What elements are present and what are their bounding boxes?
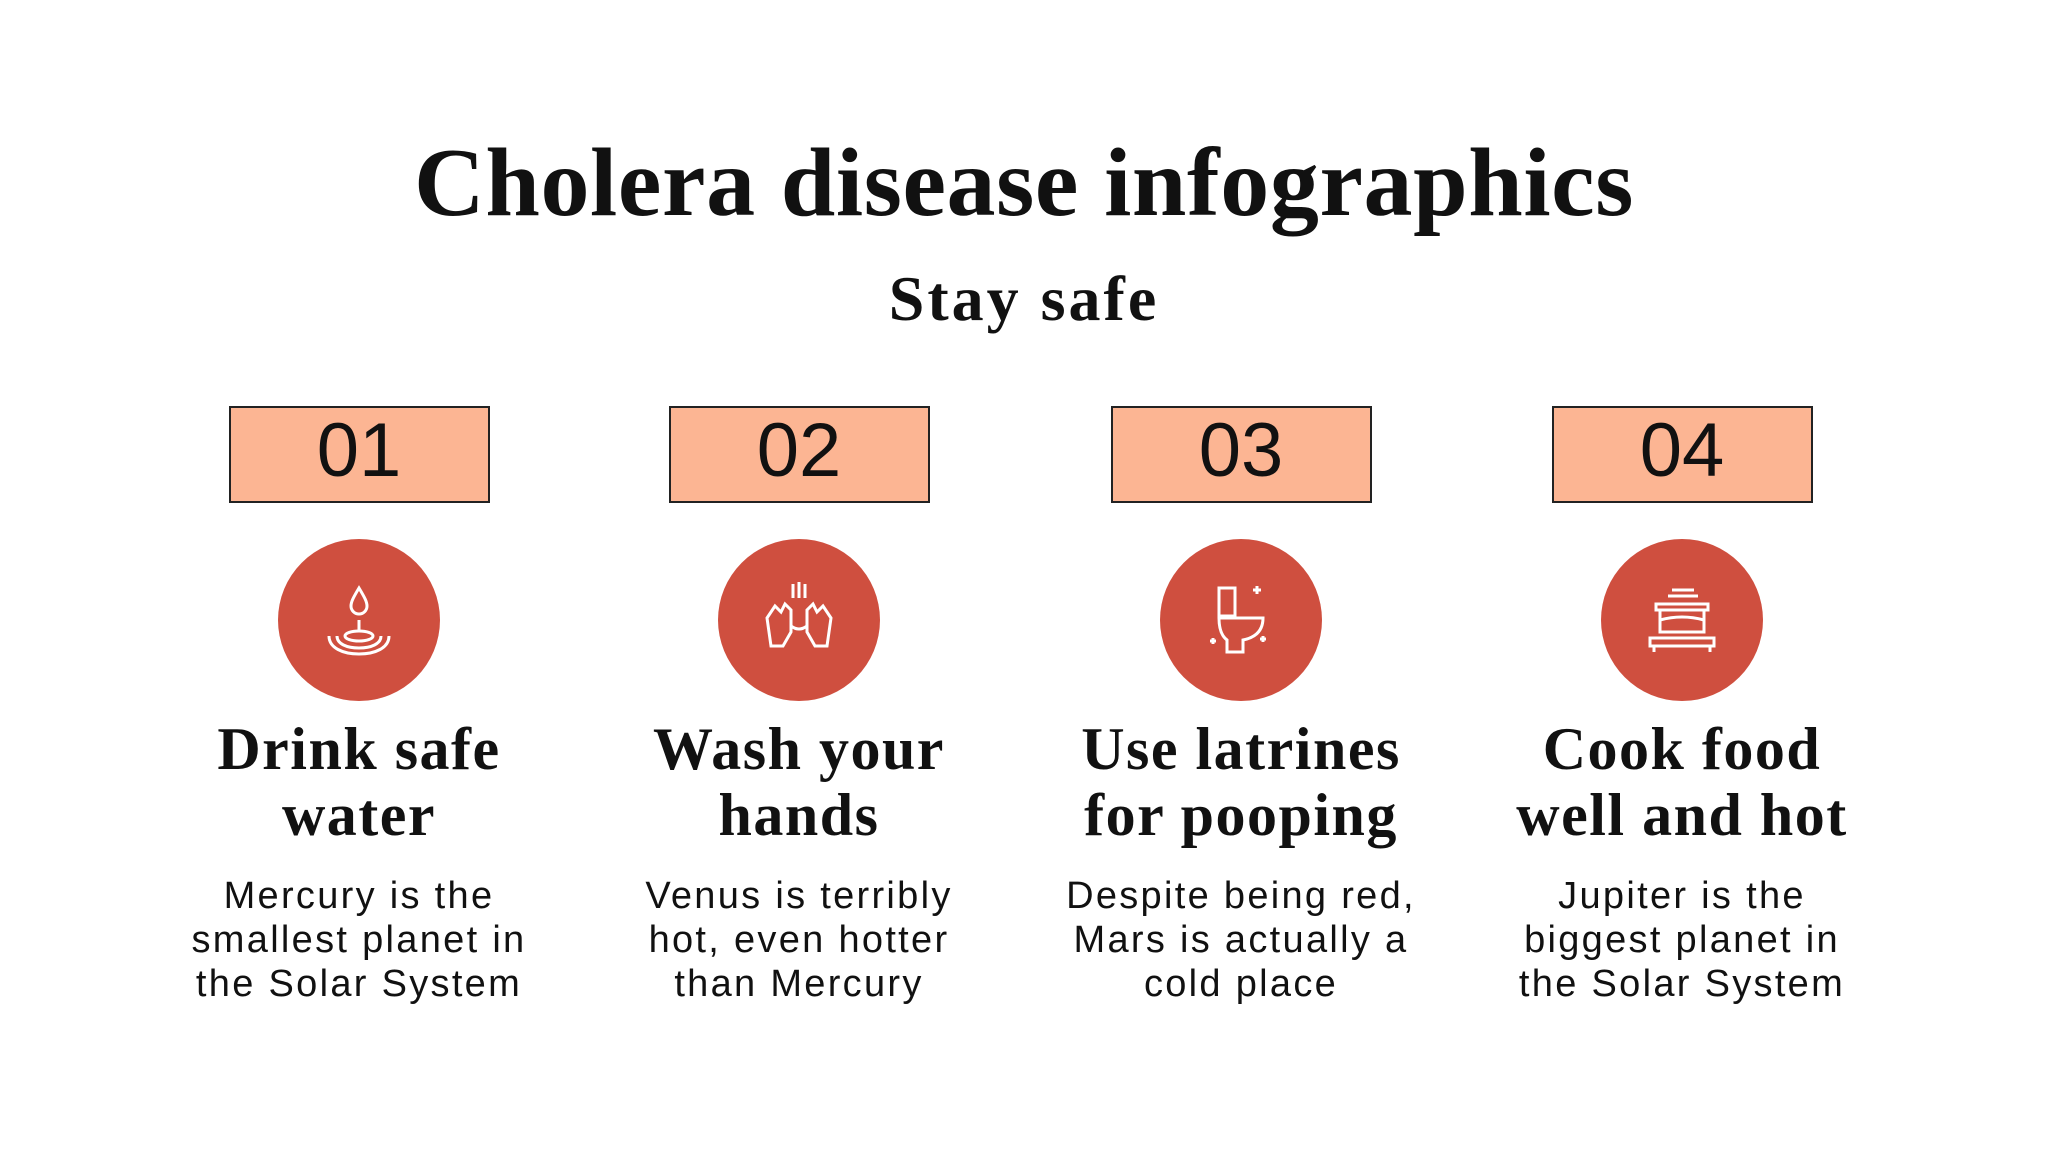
icon: cooking pot: [1601, 539, 1763, 701]
number badge 01: [228, 406, 490, 503]
text: biggest planet in: [1524, 919, 1840, 961]
heading: well and hot: [1516, 782, 1848, 848]
heading: Use latrines: [1081, 716, 1401, 782]
text: smallest planet in: [192, 919, 526, 961]
text: Jupiter is the: [1558, 875, 1806, 917]
panel: step 03: [1066, 406, 1416, 1005]
icon: toilet: [1160, 539, 1322, 701]
number badge 01: 01: [317, 408, 401, 493]
text: hot, even hotter: [649, 919, 949, 961]
number badge 02: 02: [757, 408, 841, 493]
heading: hands: [719, 782, 879, 848]
icon: hands: [718, 539, 880, 701]
icon: water drop: [278, 539, 440, 701]
panel: step 04: [1516, 406, 1848, 1005]
heading: [1516, 716, 1848, 848]
number badge 03: [1110, 406, 1372, 503]
number badge 02: [668, 406, 930, 503]
heading: Wash your: [653, 716, 945, 782]
panel: step 01: [192, 406, 526, 1005]
text: than Mercury: [674, 963, 924, 1005]
heading: Cook food: [1543, 716, 1821, 782]
text: cold place: [1144, 963, 1338, 1005]
text: Mercury is the: [224, 875, 494, 917]
text: [192, 875, 526, 1005]
text: Despite being red,: [1066, 875, 1416, 917]
subtitle: Stay safe: [889, 263, 1159, 334]
number badge 03: 03: [1199, 408, 1283, 493]
panel: step 02: [645, 406, 953, 1005]
heading: [1081, 716, 1401, 848]
heading: for pooping: [1084, 782, 1398, 848]
heading: Drink safe: [217, 716, 501, 782]
title: Cholera disease infographics: [414, 129, 1634, 237]
text: the Solar System: [196, 963, 522, 1005]
text: [1066, 875, 1416, 1005]
text: Venus is terribly: [645, 875, 953, 917]
text: Mars is actually a: [1074, 919, 1408, 961]
heading: [217, 716, 501, 848]
number badge 04: [1552, 406, 1812, 503]
number badge 04: 04: [1640, 408, 1724, 493]
heading: [653, 716, 945, 848]
text: [1519, 875, 1845, 1005]
text: the Solar System: [1519, 963, 1845, 1005]
heading: water: [282, 782, 436, 848]
text: [645, 875, 953, 1005]
